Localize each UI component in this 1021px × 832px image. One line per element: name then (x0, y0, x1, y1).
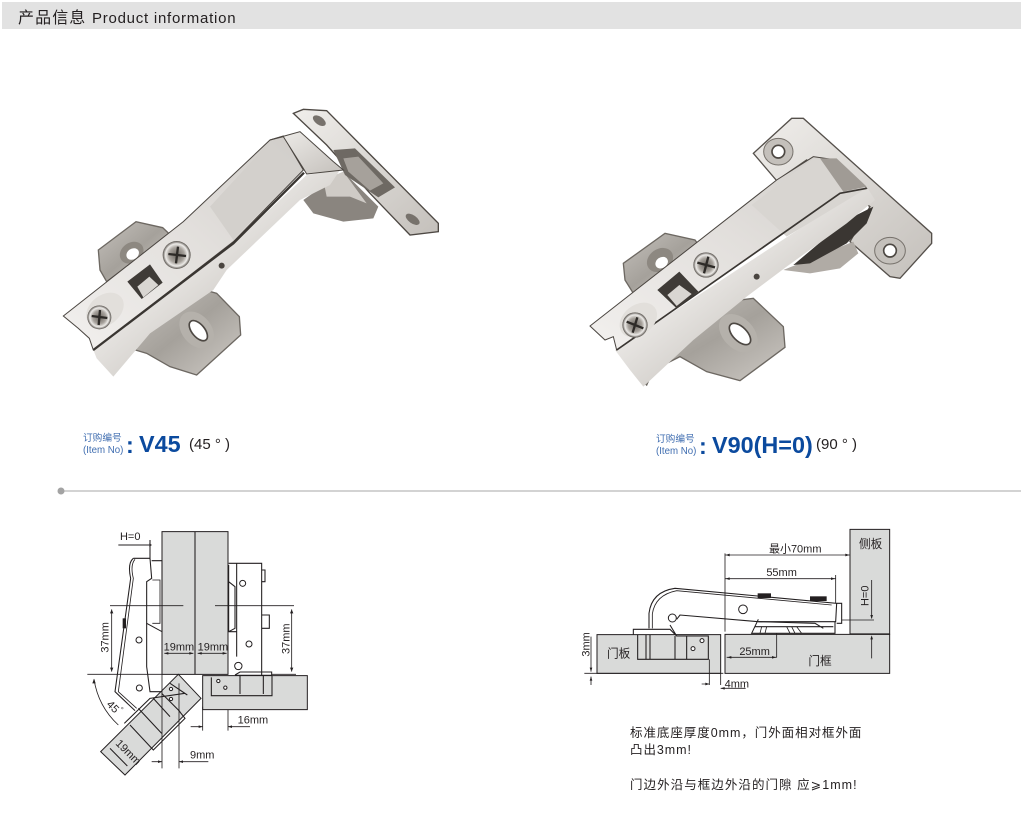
item number: V45: V45 (139, 431, 181, 457)
diagram: V90 installation dimensions: 侧板 (859, 537, 883, 551)
diagram: V90 installation dimensions: 4mm (725, 679, 749, 691)
diagram: V45 installation dimensions: 9mm (190, 750, 214, 762)
item number: V45: : (126, 432, 134, 458)
diagram: V90 installation dimensions: 55mm (766, 567, 797, 579)
diagram: V45 installation dimensions: 45 (104, 699, 121, 716)
photo: 45 degree hinge (63, 109, 438, 377)
header bar: Product information (92, 10, 236, 27)
item number: V90: V90(H=0) (712, 432, 813, 458)
item number: V45: (45 ° ) (189, 436, 230, 453)
installation notes: 门边外沿与框边外沿的门隙 应⩾1mm! (630, 777, 858, 792)
diagram: V90 installation dimensions: 门框 (808, 654, 832, 668)
section divider (58, 488, 1021, 494)
installation notes (630, 725, 862, 792)
item number: V45: (Item No) (83, 445, 123, 456)
diagram: V45 installation dimensions: 37mm (99, 622, 111, 653)
diagram: V90 installation dimensions: H=0 (859, 586, 871, 606)
item number: V90: : (699, 433, 707, 459)
diagram: V45 installation dimensions: H=0 (120, 531, 140, 543)
item number: V45 (83, 431, 230, 458)
diagram: V90 installation dimensions: 25mm (739, 646, 770, 658)
item number: V90: (Item No) (656, 446, 696, 457)
installation notes: 凸出3mm! (630, 743, 692, 757)
diagram: V90 installation dimensions: 3mm (581, 632, 593, 657)
diagram: V45 installation dimensions: 37mm (280, 623, 292, 654)
item number: V90 (656, 432, 857, 459)
installation notes: 标准底座厚度0mm，门外面相对框外面 (630, 725, 862, 740)
item number: V90: (90 ° ) (816, 436, 857, 453)
item number: V45: 订购编号 (83, 431, 122, 444)
diagram: V90 installation dimensions (581, 529, 890, 691)
diagram: V45 installation dimensions (87, 531, 307, 775)
diagram: V90 installation dimensions: 门板 (607, 646, 631, 660)
header bar (2, 2, 1021, 29)
photo: 90 degree hinge (590, 118, 932, 387)
header bar: 产品信息 (18, 9, 86, 27)
diagram: V45 installation dimensions: 19mm (198, 642, 228, 654)
diagram: V45 installation dimensions: 16mm (238, 714, 268, 726)
diagram: V45 installation dimensions: ° (117, 705, 125, 714)
item number: V90: 订购编号 (656, 432, 695, 445)
diagram: V45 installation dimensions: 19mm (113, 738, 143, 768)
diagram: V90 installation dimensions: 最小70mm (769, 543, 821, 556)
diagram: V45 installation dimensions: 19mm (164, 642, 194, 654)
